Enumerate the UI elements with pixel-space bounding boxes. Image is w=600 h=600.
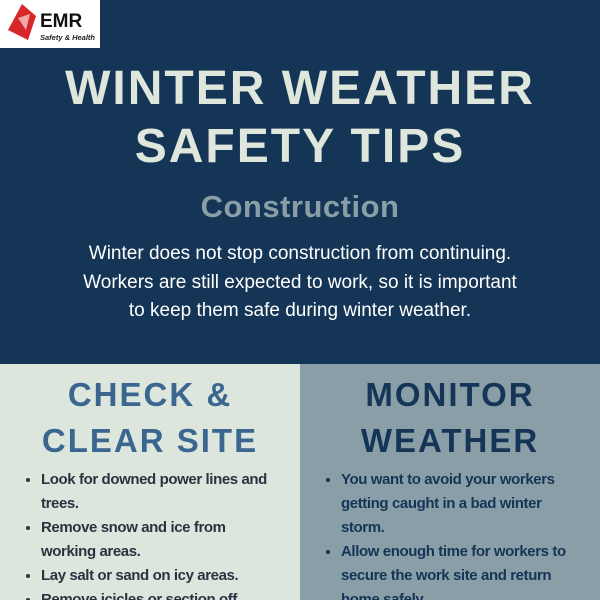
title (65, 62, 535, 173)
panel: check & clear site (0, 364, 300, 600)
intro text: Workers are still expected to work, so it is important (83, 272, 517, 292)
heading: check & clear site: CLEAR SITE (42, 422, 258, 459)
list: check items: Lay salt or sand on icy areas. (41, 567, 238, 584)
heading: check & clear site: CHECK & (68, 376, 232, 413)
title: SAFETY TIPS (135, 120, 465, 173)
panel: monitor weather (300, 364, 600, 600)
intro text (83, 243, 517, 321)
heading: monitor weather: WEATHER (361, 422, 539, 459)
logo (0, 0, 100, 48)
intro text: to keep them safe during winter weather. (129, 300, 471, 321)
list: weather items: You want to avoid your workers getting caught in a bad winter storm. (341, 471, 555, 536)
list: check items: Look for downed power lines and trees. (41, 471, 267, 512)
list: weather items (326, 471, 566, 600)
logo: Safety & Health (40, 33, 95, 42)
list: check items (26, 471, 267, 600)
subtitle: Construction (201, 189, 399, 224)
heading: monitor weather: MONITOR (365, 376, 535, 413)
title: WINTER WEATHER (65, 62, 535, 115)
logo: EMR (40, 11, 82, 32)
intro text: Winter does not stop construction from continuing. (89, 243, 511, 264)
heading: monitor weather (360, 376, 539, 459)
list: check items: Remove snow and ice from working areas. (41, 519, 226, 560)
heading: check & clear site (42, 376, 258, 459)
